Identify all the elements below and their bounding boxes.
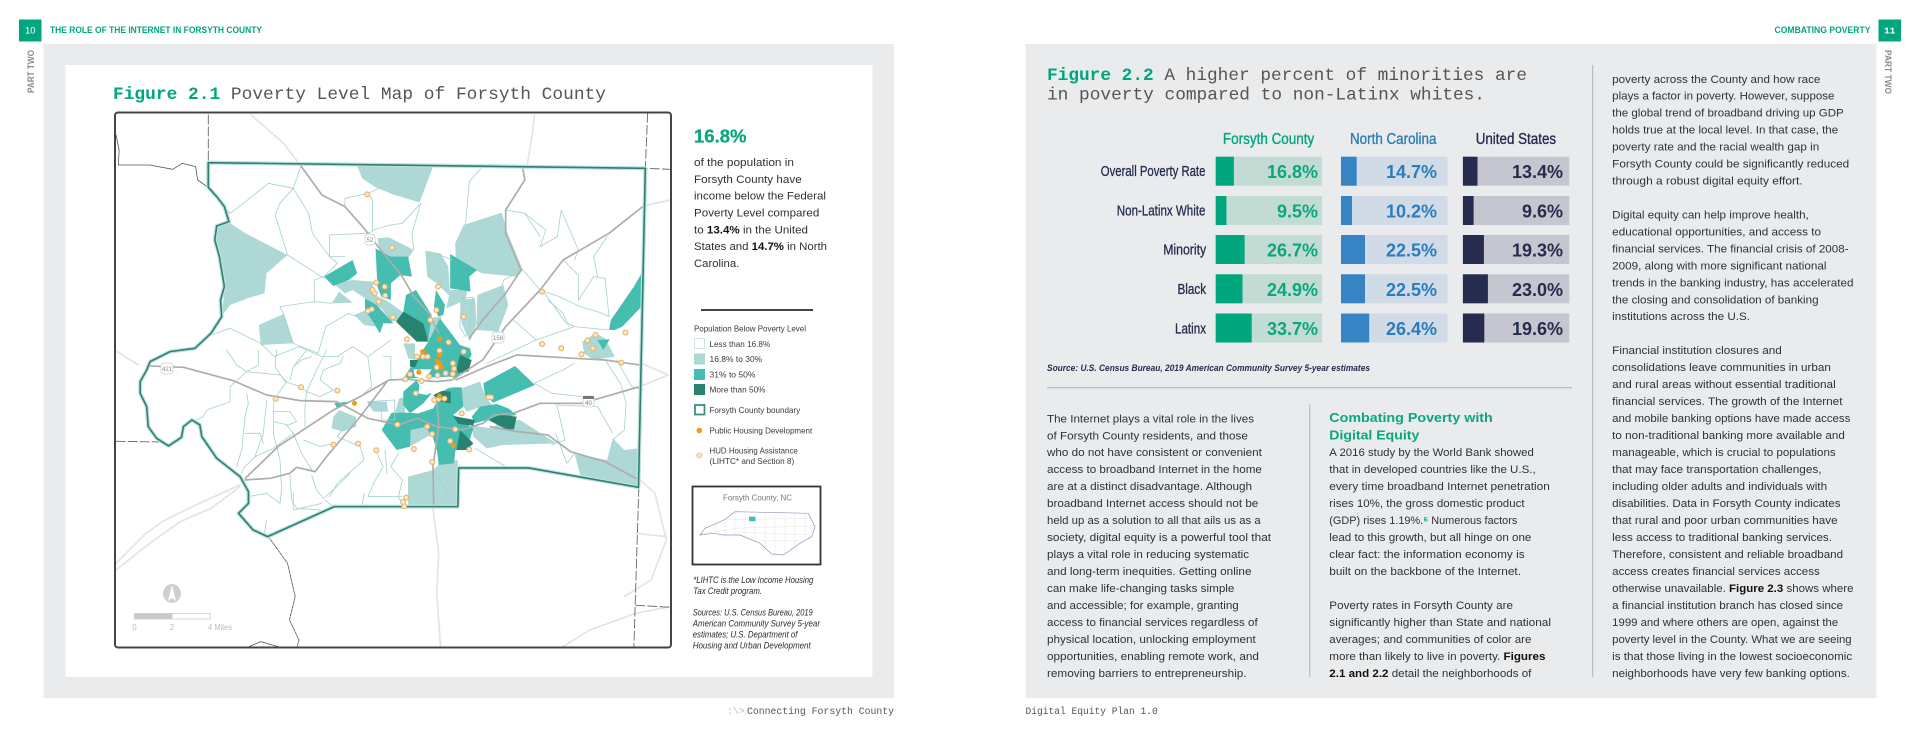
map legend: HUD Housing Assistance [710, 446, 798, 456]
figure 2.2 title [1047, 66, 1527, 105]
text column 3: Therefore, consistent and reliable broadband [1612, 549, 1843, 561]
statistic callout [694, 127, 827, 270]
text column 3: to non-traditional banking more available and [1612, 430, 1845, 442]
footer right: Digital Equity Plan 1.0 [1026, 706, 1158, 717]
text column 2: averages; and communities of color are [1329, 634, 1531, 646]
page number tab 10 [19, 20, 42, 42]
North Carolina bars: 22.5% [1386, 280, 1437, 300]
NC state outline [700, 512, 815, 555]
Forsyth County bars: 24.9% [1267, 280, 1318, 300]
text column 3: including older adults and individuals with [1612, 481, 1827, 493]
map legend: Public Housing Development [710, 426, 813, 436]
map footnotes: estimates; U.S. Department of [693, 630, 799, 640]
central medium tracts [365, 290, 535, 450]
light tracts 16.8% to 30% [215, 166, 639, 507]
left page [19, 20, 894, 717]
text column 2: Poverty rates in Forsyth County are [1329, 600, 1513, 612]
text column 3: plays a factor in poverty. However, suppose [1612, 91, 1834, 103]
North Carolina bars: 10.2% [1386, 201, 1437, 221]
text column 1: opportunities, enabling remote work, and [1047, 651, 1259, 663]
highway shield 421: 421 [162, 367, 173, 373]
scale bar: 2 [170, 623, 175, 632]
highway shield 52 [365, 234, 375, 245]
chart source: Source: U.S. Census Bureau, 2019 American Community Survey 5-year estimates [1047, 363, 1370, 373]
statistic callout: to 13.4% in the United [694, 224, 808, 236]
text column 3 [1612, 74, 1854, 680]
central dark tracts [396, 312, 517, 450]
text column 3: is that those living in the lowest socioeconomic [1612, 651, 1853, 663]
text column 3: Financial institution closures and [1612, 345, 1782, 357]
heading: combating poverty [1329, 410, 1493, 443]
text column 1: plays a vital role in reducing systematic [1047, 549, 1250, 561]
text column 3: trends in the banking industry, has accelerated [1612, 278, 1854, 290]
United States bars: 13.4% [1512, 162, 1563, 182]
statistic callout: 16.8% [694, 127, 746, 147]
map legend: (LIHTC* and Section 8) [710, 456, 794, 466]
text column 3: educational opportunities, and access to [1612, 226, 1821, 238]
row labels: Minority [1163, 242, 1207, 258]
column headers: United States [1476, 131, 1556, 148]
text column 3: manageable, which is crucial to populations [1612, 447, 1836, 459]
county fill [140, 163, 645, 537]
page number tab 10: 10 [25, 26, 36, 36]
map footnotes: *LIHTC is the Low Income Housing [693, 575, 813, 585]
text column 1: and long-term inequities. Getting online [1047, 566, 1252, 578]
HUD housing assistance points [276, 194, 625, 506]
footer left: :\> [727, 706, 745, 717]
map legend: 31% to 50% [710, 370, 756, 380]
text column 1: can make life-changing tasks simple [1047, 583, 1234, 595]
statistic callout: Poverty Level compared [694, 208, 819, 220]
map legend: 16.8% to 30% [710, 354, 763, 364]
white figure panel [66, 65, 872, 677]
text column 3: disabilities. Data in Forsyth County indicates [1612, 498, 1841, 510]
text column 3: institutions across the U.S. [1612, 311, 1750, 323]
text column 3: access creates financial services access [1612, 566, 1820, 578]
text column 3: Digital equity can help improve health, [1612, 210, 1809, 222]
text column 1: and accessible; for example, granting [1047, 600, 1239, 612]
map frame [115, 112, 671, 648]
map legend: Less than 16.8% [710, 339, 771, 349]
text column 3: that rural and poor urban communities have [1612, 515, 1838, 527]
public housing points [354, 339, 453, 446]
text column 3: holds true at the local level. In that case, the [1612, 125, 1838, 137]
text column 3: consolidations leave communities in urban [1612, 362, 1831, 374]
medium tracts outer 31% to 50% [324, 248, 643, 465]
Forsyth County bars: 9.5% [1277, 201, 1318, 221]
text column 1: The Internet plays a vital role in the lives [1047, 413, 1255, 425]
text column 3: a financial institution branch has closed since [1612, 600, 1843, 612]
highway shield 421 [161, 363, 173, 374]
central light inside south [410, 427, 430, 447]
text column 3: poverty across the County and how race [1612, 74, 1820, 86]
text column 2: A 2016 study by the World Bank showed [1329, 447, 1534, 459]
text column 3: that may face transportation challenges, [1612, 464, 1822, 476]
statistic callout: of the population in [694, 157, 794, 169]
running header right: COMBATING POVERTY [1774, 25, 1870, 35]
locator inset [692, 486, 820, 564]
North Carolina bars: 14.7% [1386, 162, 1437, 182]
western tract lines [197, 350, 350, 510]
text column 3: 2009, along with more significant national [1612, 260, 1826, 272]
highways [150, 166, 643, 507]
highway shield 40: 40 [585, 401, 592, 407]
text column 3: financial services. The growth of the Internet [1612, 396, 1842, 408]
column headers [1223, 131, 1556, 148]
text column 2: more than likely to live in poverty. Figures [1329, 651, 1546, 663]
row labels [1101, 163, 1207, 338]
map legend [694, 324, 813, 466]
United States bars: 23.0% [1512, 280, 1563, 300]
map legend: More than 50% [710, 385, 766, 395]
grey page panel right [1026, 44, 1876, 698]
text column 3: and rural areas without essential traditional [1612, 379, 1836, 391]
highway shield 158 [492, 332, 504, 343]
United States bars: 19.6% [1512, 319, 1563, 339]
icon: north arrow [163, 584, 181, 603]
text column 2: significantly higher than State and national [1329, 617, 1551, 629]
bar chart table [1101, 131, 1569, 342]
text column 3: 1999 and where others are open, against the [1612, 617, 1838, 629]
text column 2: built on the backbone of the Internet. [1329, 566, 1521, 578]
text column 1: who do not have consistent or convenient [1046, 447, 1262, 459]
text column 2: that in developed countries like the U.S., [1329, 464, 1536, 476]
text column 1: removing barriers to entrepreneurship. [1047, 668, 1247, 680]
text column 1: society, digital equity is a powerful tool that [1047, 532, 1271, 544]
central light tracts [367, 285, 557, 448]
text column 3: financial services. The financial crisis of 2008- [1612, 244, 1849, 256]
part label right: PART TWO [1882, 50, 1893, 94]
North Carolina bars: 26.4% [1386, 319, 1437, 339]
heading: combating poverty: Digital Equity [1329, 428, 1420, 443]
text column 1: broadband Internet access should not be [1047, 498, 1258, 510]
statistic callout: income below the Federal [694, 190, 826, 202]
poverty level map [115, 112, 671, 648]
text column 3: poverty rate and the racial wealth gap in [1612, 142, 1819, 154]
footer left: Connecting Forsyth County [747, 706, 894, 717]
map footnotes: Tax Credit program. [693, 586, 762, 596]
United States bars: 9.6% [1522, 201, 1563, 221]
Forsyth County bars: 33.7% [1267, 319, 1318, 339]
figure 2.2 title: Figure 2.2 A higher percent of minorities are [1047, 66, 1527, 86]
text column 3: through a robust digital equity effort. [1612, 176, 1803, 188]
heading: combating poverty: Combating Poverty with [1329, 410, 1493, 425]
county boundary [140, 163, 645, 537]
text column 3: Forsyth County could be significantly reduced [1612, 158, 1849, 170]
text column 2: 2.1 and 2.2 detail the neighborhoods of [1329, 668, 1532, 680]
text column 3: and mobile banking options have made access [1612, 413, 1851, 425]
locator inset: Forsyth County, NC [723, 493, 792, 503]
row labels: Black [1178, 281, 1206, 298]
row labels: Overall Poverty Rate [1101, 163, 1205, 180]
running header left: THE ROLE OF THE INTERNET IN FORSYTH COUNTY [50, 25, 262, 35]
statistic callout: Forsyth County have [694, 174, 802, 186]
map footnotes: Sources: U.S. Census Bureau, 2019 [693, 608, 813, 618]
highway shield 40 [583, 396, 594, 407]
highway shield 52: 52 [367, 238, 374, 244]
map legend: Forsyth County boundary [710, 405, 801, 415]
page number tab 11 [1878, 20, 1901, 42]
text column 1: access to broadband Internet in the home [1047, 464, 1262, 476]
text column 2: clear fact: the information economy is [1329, 549, 1525, 561]
census tract lines [208, 166, 643, 533]
text column 1: held up as a solution to all that ails us as a [1047, 515, 1262, 527]
text column 1: are at a distinct disadvantage. Although [1047, 481, 1252, 493]
faint roads outside county [116, 115, 670, 647]
central white gaps [413, 369, 443, 395]
row labels: Non-Latinx White [1117, 202, 1205, 220]
text column 2: lead to this growth, but all hinge on one [1329, 532, 1531, 544]
Forsyth County bars: 16.8% [1267, 162, 1318, 182]
text column 2: rises 10%, the gross domestic product [1329, 498, 1525, 510]
North Carolina bars: 22.5% [1386, 240, 1437, 260]
United States bars [1463, 157, 1569, 342]
text column 1: physical location, unlocking employment [1047, 634, 1256, 646]
highway shield 158: 158 [493, 336, 504, 342]
map footnotes: Housing and Urban Development [693, 640, 811, 650]
text column 3: the global trend of broadband driving up GDP [1612, 108, 1844, 120]
Forsyth County bars: 26.7% [1267, 240, 1318, 260]
text column 1 [1046, 413, 1271, 680]
text column 2: (GDP) rises 1.19%.⁶ Numerous factors [1329, 515, 1518, 527]
figure 2.1 title: Figure 2.1 Poverty Level Map of Forsyth County [113, 85, 606, 105]
row labels: Latinx [1175, 320, 1206, 338]
text column 3: the closing and consolidation of banking [1612, 294, 1819, 306]
map footnotes: American Community Survey 5-year [692, 618, 821, 628]
scale bar: 4 Miles [208, 623, 232, 632]
map legend: Population Below Poverty Level [694, 324, 806, 334]
Forsyth County bars [1216, 157, 1322, 342]
outside dashed boundaries [116, 113, 670, 647]
map footnotes [692, 575, 821, 650]
statistic callout: Carolina. [694, 258, 739, 270]
text column 1: of Forsyth County residents, and those [1047, 430, 1248, 442]
text column 3: otherwise unavailable. Figure 2.3 shows where [1612, 583, 1854, 595]
right page [1026, 20, 1901, 717]
scale bar: 0 [132, 623, 137, 632]
page number tab 11: 11 [1884, 26, 1896, 36]
statistic callout: States and 14.7% in North [694, 241, 827, 253]
grey page panel left [44, 44, 894, 698]
text column 3: less access to traditional banking services. [1612, 532, 1832, 544]
text column 3: neighborhoods have very few banking options. [1612, 668, 1850, 680]
text column 2 [1329, 447, 1551, 680]
column headers: Forsyth County [1223, 131, 1315, 148]
scale bar [132, 614, 232, 632]
United States bars: 19.3% [1512, 240, 1563, 260]
North Carolina bars [1341, 157, 1447, 342]
text column 1: access to financial services regardless of [1047, 617, 1259, 629]
central city tracts [365, 285, 557, 450]
column headers: North Carolina [1350, 131, 1437, 148]
part label left: PART TWO [26, 50, 37, 93]
text column 3: poverty level in the County. What we are seeing [1612, 634, 1852, 646]
figure 2.2 title: in poverty compared to non-Latinx whites. [1047, 85, 1485, 105]
text column 2: every time broadband Internet penetration [1329, 481, 1550, 493]
